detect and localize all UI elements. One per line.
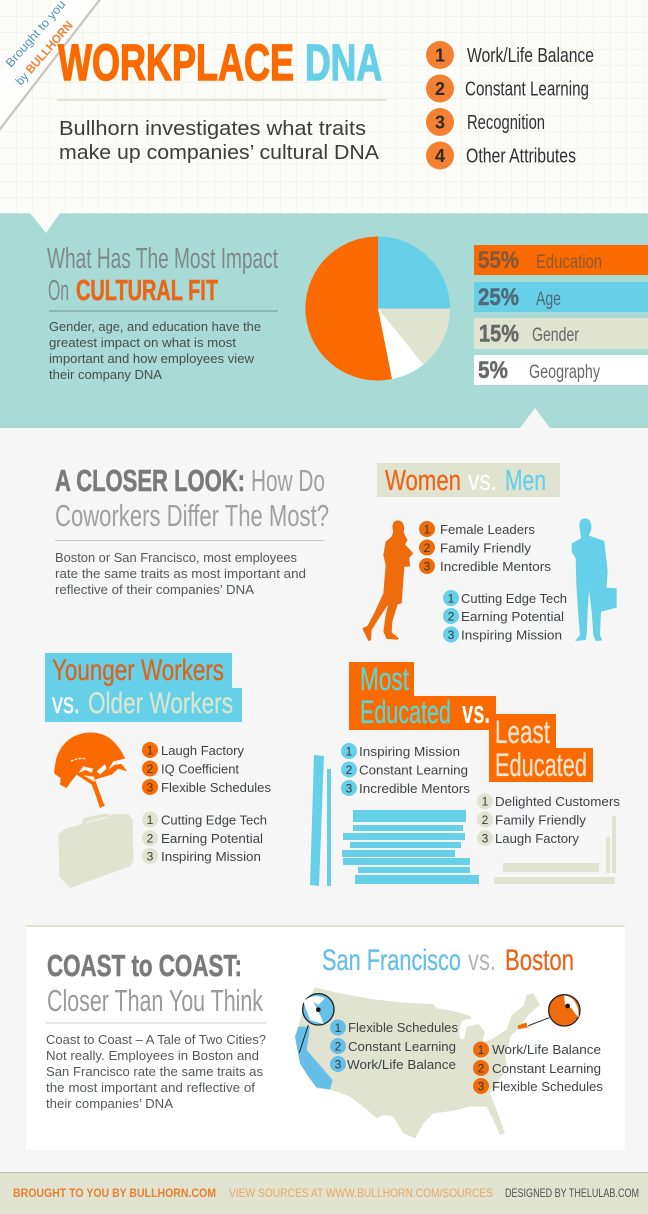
- text: closer look description: [55, 550, 306, 597]
- list: san francisco: Constant Learning: [348, 1039, 456, 1054]
- heading: san francisco vs boston: San Francisco: [322, 944, 461, 977]
- list: least educated: 2: [482, 813, 489, 827]
- list: men: [443, 590, 567, 642]
- heading: coast to coast: [47, 948, 263, 1018]
- heading: san francisco vs boston: Boston: [505, 944, 574, 977]
- header list of attributes: Recognition: [467, 112, 545, 134]
- icon: blue stack of books: [310, 755, 479, 886]
- text: cultural fit description: Gender, age, and education have the: [49, 319, 261, 334]
- text: closer look description: rate the same traits as most important and: [55, 566, 306, 581]
- heading: san francisco vs boston: vs.: [468, 944, 496, 977]
- list: boston: Constant Learning: [492, 1061, 601, 1076]
- list: women: Family Friendly: [440, 540, 532, 556]
- list: most educated: [341, 743, 471, 796]
- heading: coast to coast: Closer Than You Think: [47, 983, 263, 1018]
- list: older workers: Earning Potential: [161, 831, 263, 846]
- heading: cultural fit: [47, 243, 278, 307]
- list: women: Incredible Mentors: [440, 559, 552, 574]
- list: boston: 1: [478, 1043, 485, 1057]
- text: cultural fit description: [49, 319, 261, 382]
- list: least educated: Delighted Customers: [495, 794, 621, 809]
- list: older workers: 3: [147, 850, 154, 864]
- heading: younger vs older: vs.: [52, 687, 80, 720]
- legend: percentages: [474, 245, 648, 385]
- list: san francisco: [330, 1020, 458, 1072]
- list: san francisco: Work/Life Balance: [347, 1057, 456, 1072]
- region: california: [295, 1027, 333, 1089]
- list: least educated: Family Friendly: [495, 812, 587, 828]
- panel: footer: [0, 1172, 648, 1214]
- legend: percentages: Age: [536, 289, 561, 310]
- list: younger workers: 1: [147, 744, 154, 758]
- text: coast to coast description: [46, 1032, 266, 1111]
- list: younger workers: 3: [147, 780, 154, 794]
- subtitle: [57, 99, 386, 164]
- panel: younger vs older workers: [45, 653, 271, 888]
- corner ribbon: brought to you by Bullhorn: [0, 0, 101, 131]
- heading: most vs least educated: Most: [360, 661, 409, 697]
- text: coast to coast description: the most important and reflective of: [46, 1080, 255, 1095]
- list: women: 1: [424, 522, 431, 536]
- heading: most vs least educated: Least: [495, 714, 550, 750]
- panel: cultural fit: [0, 213, 648, 428]
- list: most educated: 1: [346, 744, 353, 758]
- heading: women vs men: vs.: [468, 465, 497, 497]
- list: younger workers: IQ Coefficient: [161, 762, 239, 776]
- legend: percentages: Geography: [529, 362, 600, 383]
- list: least educated: 3: [482, 832, 489, 846]
- list: boston: 2: [478, 1062, 485, 1076]
- corner ribbon: brought to you by Bullhorn: by BULLHORN: [13, 18, 76, 88]
- list: least educated: 1: [482, 794, 489, 808]
- footer credit: Bullhorn: BROUGHT TO YOU BY BULLHORN.COM: [13, 1186, 216, 1200]
- text: closer look description: Boston or San Francisco, most employees: [55, 550, 297, 565]
- header list of attributes: 2: [435, 79, 445, 99]
- list: boston: [473, 1042, 603, 1094]
- title accent: DNA: DNA: [305, 34, 382, 91]
- list: women: Female Leaders: [440, 522, 535, 537]
- header list of attributes: Work/Life Balance: [467, 45, 594, 67]
- list: older workers: Inspiring Mission: [161, 849, 261, 864]
- list: women: 2: [424, 541, 431, 555]
- map: united states: [295, 987, 580, 1138]
- list: san francisco: 1: [335, 1021, 342, 1035]
- footer sources: VIEW SOURCES AT WWW.BULLHORN.COM/SOURCES: [229, 1186, 493, 1200]
- icon: briefcase: [58, 813, 133, 888]
- list: most educated: Incredible Mentors: [359, 781, 471, 796]
- panel: header: [0, 0, 648, 213]
- list: older workers: 2: [147, 832, 154, 846]
- list: older workers: 1: [147, 813, 154, 827]
- list: boston: Work/Life Balance: [492, 1042, 601, 1057]
- region: massachusetts: [518, 1023, 532, 1029]
- list: most educated: Constant Learning: [359, 762, 468, 778]
- heading: a closer look: Coworkers Differ The Most?: [55, 498, 329, 533]
- notch: bottom triangle: [520, 408, 550, 428]
- header list of attributes: 3: [435, 112, 445, 132]
- heading: a closer look: [55, 463, 329, 533]
- list: older workers: Cutting Edge Tech: [161, 812, 267, 828]
- list: most educated: Inspiring Mission: [359, 744, 460, 759]
- callout: san francisco magnifier: [299, 994, 334, 1053]
- text: cultural fit description: greatest impact on what is most: [49, 335, 236, 350]
- list: most educated: 2: [346, 763, 353, 777]
- pie chart: [305, 236, 450, 380]
- heading: younger vs older: Younger Workers: [52, 654, 224, 687]
- notch: top triangle: [30, 213, 60, 233]
- heading: cultural fit: On: [48, 275, 69, 307]
- list: women: [419, 521, 552, 574]
- icon: beige stack of books: [494, 816, 616, 884]
- heading: women vs men: Men: [505, 465, 546, 497]
- heading: younger vs older: [45, 653, 242, 722]
- header list of attributes: 1: [435, 46, 445, 66]
- heading: women vs men: Women: [385, 465, 461, 497]
- list: younger workers: Laugh Factory: [161, 743, 244, 758]
- heading: younger vs older: Older Workers: [88, 687, 233, 720]
- heading: most vs least educated: [349, 661, 593, 783]
- list: younger workers: 2: [147, 762, 154, 776]
- heading: women vs men: [377, 463, 560, 497]
- legend: percentages: 55%: [478, 247, 519, 274]
- header list of attributes: [426, 41, 594, 170]
- list: boston: Flexible Schedules: [492, 1079, 603, 1094]
- list: san francisco: 3: [335, 1058, 342, 1072]
- legend: percentages: 15%: [479, 320, 519, 348]
- panel: women vs men: [362, 463, 617, 642]
- icon: helmet: [54, 733, 127, 808]
- legend: percentages: 5%: [478, 357, 508, 384]
- heading: most vs least educated: Educated: [495, 747, 587, 783]
- subtitle: Bullhorn investigates what traits: [59, 117, 366, 140]
- list: women: 3: [424, 560, 431, 574]
- subtitle: make up companies’ cultural DNA: [59, 141, 379, 164]
- list: younger workers: [142, 742, 271, 795]
- list: boston: 3: [478, 1080, 485, 1094]
- legend: percentages: Education: [536, 252, 602, 273]
- panel: coast to coast: [26, 925, 625, 1150]
- callout: boston magnifier: [528, 995, 580, 1026]
- list: older workers: [142, 812, 267, 864]
- panel: most vs least educated: [310, 661, 621, 886]
- text: closer look description: reflective of their companies’ DNA: [55, 582, 254, 597]
- list: men: 2: [448, 610, 455, 624]
- heading: coast to coast: COAST to COAST:: [47, 948, 242, 983]
- list: men: Earning Potential: [461, 609, 564, 624]
- list: san francisco: 2: [335, 1040, 342, 1054]
- text: coast to coast description: Not really. Employees in Boston and: [46, 1048, 259, 1063]
- list: men: 3: [448, 628, 455, 642]
- list: most educated: 3: [346, 782, 353, 796]
- heading: most vs least educated: vs.: [462, 694, 490, 730]
- list: men: Inspiring Mission: [461, 628, 562, 642]
- heading: cultural fit: CULTURAL FIT: [76, 275, 218, 307]
- corner ribbon: brought to you by Bullhorn: Brought to you: [3, 0, 68, 70]
- list: san francisco: Flexible Schedules: [348, 1020, 458, 1035]
- text: coast to coast description: their companies’ DNA: [46, 1096, 173, 1111]
- heading: cultural fit: What Has The Most Impact: [47, 243, 278, 275]
- legend: percentages: Gender: [532, 325, 579, 346]
- title: WORKPLACE: [58, 34, 294, 91]
- text: cultural fit description: important and how employees view: [49, 351, 255, 366]
- legend: percentages: 25%: [478, 284, 519, 311]
- list: men: Cutting Edge Tech: [461, 591, 567, 606]
- header list of attributes: Other Attributes: [466, 146, 576, 168]
- list: younger workers: Flexible Schedules: [161, 780, 271, 795]
- list: men: 1: [448, 592, 455, 606]
- icon: man silhouette: [572, 518, 617, 641]
- text: cultural fit description: their company DNA: [49, 367, 162, 382]
- header list of attributes: Constant Learning: [465, 78, 589, 100]
- heading: a closer look: How Do: [251, 463, 325, 498]
- heading: a closer look: A CLOSER LOOK:: [55, 463, 245, 498]
- header list of attributes: 4: [435, 146, 445, 166]
- heading: most vs least educated: Educated: [360, 694, 451, 730]
- text: coast to coast description: San Francisco rate the same traits as: [46, 1064, 264, 1079]
- text: coast to coast description: Coast to Coast – A Tale of Two Cities?: [46, 1032, 266, 1047]
- icon: woman silhouette: [362, 520, 413, 641]
- list: least educated: Laugh Factory: [495, 831, 579, 846]
- list: least educated: [477, 793, 621, 846]
